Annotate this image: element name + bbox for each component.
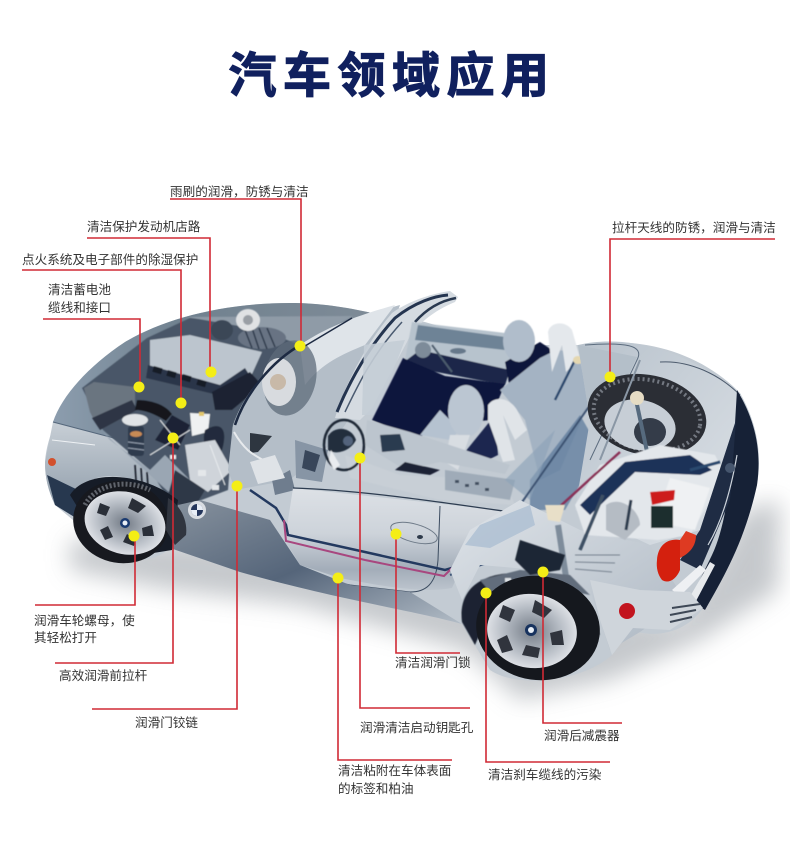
dark hose <box>135 400 172 421</box>
lower sill <box>170 500 462 624</box>
rear seat backs <box>505 342 552 400</box>
suspension tower <box>257 335 323 421</box>
lower bay <box>103 432 190 495</box>
control unit <box>250 433 272 453</box>
title: 汽车领域应用 <box>228 50 556 103</box>
front hoop <box>488 399 527 462</box>
callout: front tie rod <box>55 432 178 683</box>
coil spring <box>238 327 286 349</box>
rear bumper with reflector and exhaust <box>590 580 703 655</box>
central tunnel glass <box>530 415 600 510</box>
trunk mechanicals <box>545 445 725 590</box>
interior cabin <box>324 320 600 510</box>
brake master <box>155 415 190 450</box>
callout: door lock <box>390 528 471 670</box>
callout: brake cable: 清洁刹车缆线的污染 <box>488 767 602 782</box>
callout: antenna <box>604 220 776 382</box>
door inner panel <box>405 322 515 380</box>
car body silhouette <box>45 303 759 681</box>
rear wheel <box>469 568 607 688</box>
callout: wiper: 雨刷的润滑，防锈与清洁 <box>170 184 309 199</box>
valve cover <box>150 335 262 392</box>
callout: label residue: 清洁粘附在车体表面 <box>338 764 451 778</box>
dark footwell <box>372 358 505 438</box>
callout: battery <box>43 283 144 392</box>
ground shadow <box>70 500 780 700</box>
console <box>365 420 510 474</box>
intake ports <box>146 365 250 395</box>
callout: front tie rod: 高效润滑前拉杆 <box>59 668 148 683</box>
callout: battery: 清洁蓄电池 <box>48 283 111 297</box>
callout: door hinge <box>92 480 242 730</box>
front wheel <box>67 473 186 571</box>
callout: label residue: 的标签和柏油 <box>338 781 414 796</box>
callout: wheel nut <box>34 530 140 645</box>
black manifold <box>212 372 262 410</box>
rear fender translucent <box>450 500 685 650</box>
callout: wiper <box>170 184 309 352</box>
strut <box>122 414 148 426</box>
callout: engine circuit: 清洁保护发动机店路 <box>87 219 201 234</box>
callout: door lock: 清洁润滑门锁 <box>395 655 471 670</box>
seat rail area <box>345 455 515 505</box>
callout: ignition key hole <box>354 452 474 735</box>
windshield glass and fender <box>228 305 400 495</box>
callout: ignition <box>22 252 198 408</box>
callout: engine circuit <box>87 219 216 378</box>
A-pillar frame <box>335 291 458 420</box>
rear hoop <box>548 323 580 372</box>
illustration: cutaway convertible car <box>45 291 780 700</box>
rear quarter dark edge <box>680 390 759 610</box>
callout: ignition key hole: 润滑清洁启动钥匙孔 <box>360 721 474 735</box>
front bumper <box>45 422 178 518</box>
rear wheel arch <box>462 540 620 645</box>
tail lights <box>657 531 706 596</box>
callout: wheel nut: 其轻松打开 <box>34 631 97 645</box>
brake pipes <box>250 490 520 570</box>
callout: wheel nut: 润滑车轮螺母，使 <box>34 613 135 628</box>
firewall clutter <box>234 432 276 470</box>
hood top band <box>53 303 372 470</box>
callout: antenna: 拉杆天线的防锈，润滑与清洁 <box>612 220 776 235</box>
reservoir cap <box>211 320 233 340</box>
trunk with spare tyre <box>575 341 744 545</box>
steering wheel <box>324 420 364 470</box>
hood edge <box>187 316 353 345</box>
callout: battery: 缆线和接口 <box>48 300 111 315</box>
callout: rear shock absorber: 润滑后减震器 <box>544 729 620 743</box>
turbo <box>236 309 260 331</box>
door and side panel <box>170 488 530 624</box>
callout: door hinge: 润滑门铰链 <box>135 716 198 730</box>
callout: ignition: 点火系统及电子部件的除湿保护 <box>22 252 198 267</box>
BMW badge <box>188 501 206 519</box>
air box <box>84 382 135 422</box>
front seat cushion <box>420 410 460 440</box>
callout: brake cable <box>480 588 610 782</box>
callout: label residue <box>332 572 452 796</box>
callout: rear shock absorber <box>538 566 622 743</box>
engine bay <box>82 309 353 515</box>
